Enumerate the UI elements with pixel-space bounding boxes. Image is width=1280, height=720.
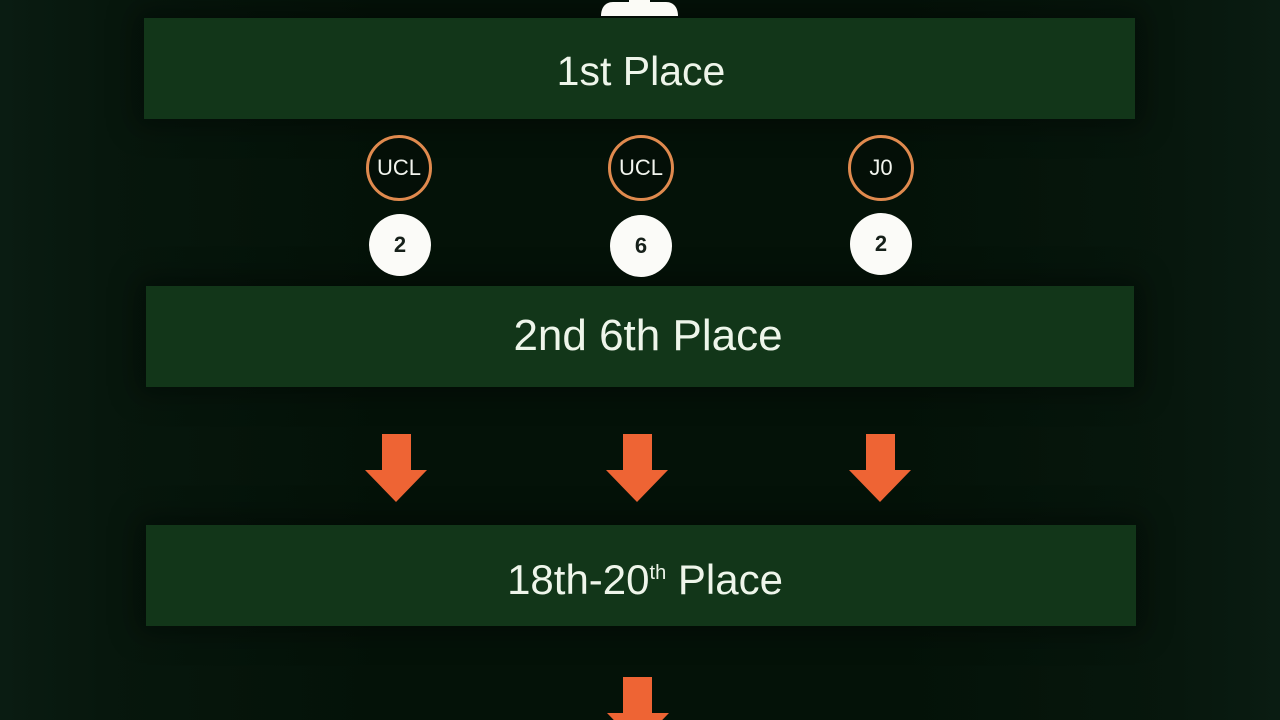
badge: UCL centre: [608, 135, 674, 201]
number circle: 6 centre: [610, 215, 672, 277]
number circle: 2 left: 2: [394, 232, 406, 257]
arrow: left down: [365, 434, 427, 502]
panel: 2nd-6th place: [146, 286, 1134, 387]
panel: 18th-20th place: [146, 525, 1136, 626]
arrow: right down: [849, 434, 911, 502]
badge: UCL left: UCL: [377, 155, 421, 180]
number circle: 6 centre: 6: [635, 233, 647, 258]
badge: UCL left: [366, 135, 432, 201]
number circle: 2 right: 2: [875, 231, 887, 256]
panel: 1st place: 1st Place: [557, 48, 725, 94]
arrow: bottom down: [607, 677, 669, 720]
badge: UCL centre: UCL: [619, 155, 663, 180]
badge: J0 right: [848, 135, 914, 201]
badge: J0 right: J0: [869, 155, 893, 180]
icon: white trophy base: [601, 0, 678, 16]
panel: 2nd-6th place: 2nd 6th Place: [513, 311, 783, 360]
panel: 18th-20th place: 18th-20th Place: [507, 556, 783, 603]
number circle: 2 right: [850, 213, 912, 275]
arrow: centre down: [606, 434, 668, 502]
panel: 1st place: [144, 18, 1135, 119]
number circle: 2 left: [369, 214, 431, 276]
